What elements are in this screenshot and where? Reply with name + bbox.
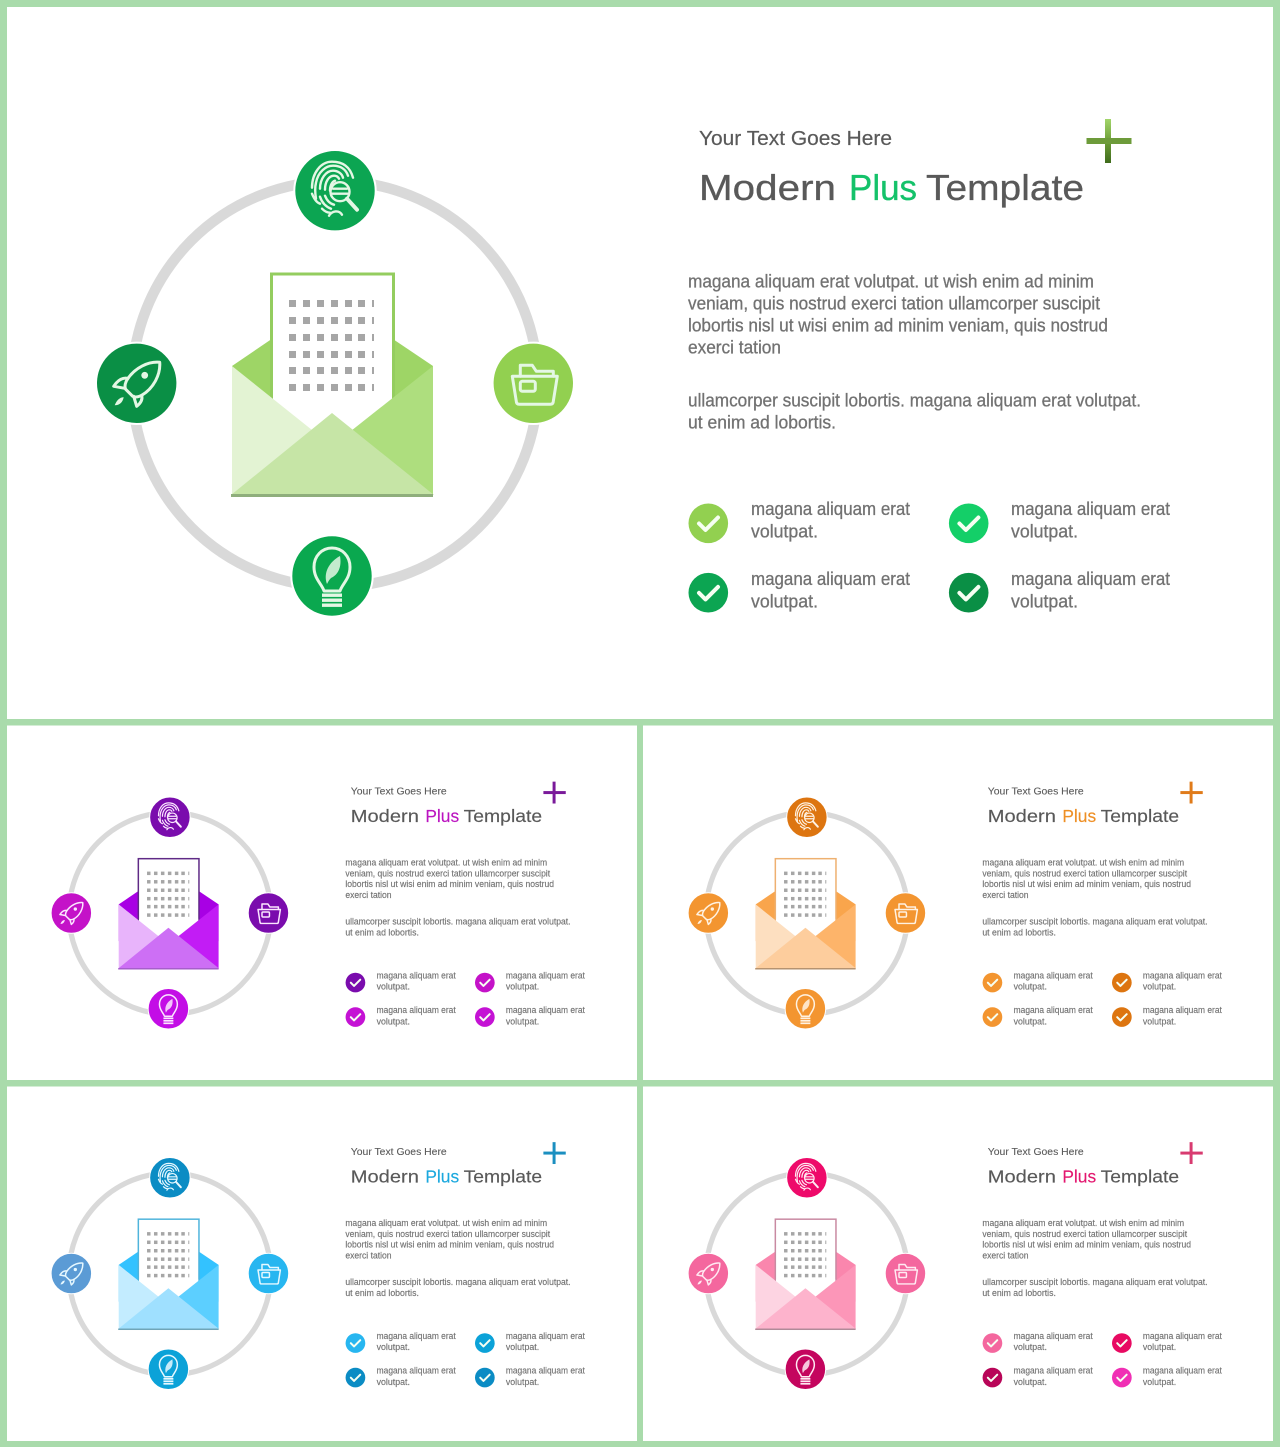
body text: exerci tation (982, 890, 1029, 900)
icon: fingerprint search (787, 797, 827, 838)
panel: main green slide (7, 7, 1273, 719)
icon: light bulb (291, 535, 373, 617)
check item 4 (1112, 1005, 1222, 1027)
body text: lobortis nisl ut wisi enim ad minim veniam, quis nostrud (982, 1240, 1191, 1250)
title: Modern (351, 1166, 419, 1186)
diagram ring (69, 1173, 271, 1375)
body text (345, 857, 570, 937)
icon: folder (493, 343, 574, 424)
subtitle: Your Text Goes Here (351, 787, 447, 798)
check item 1: volutpat. (377, 1342, 410, 1352)
body text: veniam, quis nostrud exerci tation ullamcorper suscipit (688, 294, 1100, 314)
icon: plus (543, 782, 566, 804)
body text (982, 857, 1207, 937)
check item 4: volutpat. (1143, 1377, 1176, 1387)
body text: lobortis nisl ut wisi enim ad minim veniam, quis nostrud (688, 316, 1108, 336)
envelope with paper (755, 859, 856, 970)
title: Plus (1062, 1166, 1096, 1186)
panel: purple slide (7, 726, 637, 1080)
check item 2 (1112, 970, 1222, 992)
check item 3 (983, 1366, 1093, 1387)
icon: rocket (96, 343, 177, 424)
icon: light bulb (148, 989, 189, 1029)
check item 1: volutpat. (1014, 982, 1047, 992)
title (351, 1166, 542, 1186)
check item 1: magana aliquam erat (1014, 1331, 1093, 1341)
check item 1: volutpat. (377, 982, 410, 992)
title: Plus (425, 806, 459, 826)
check item 1 (688, 499, 910, 543)
title: Modern (988, 1166, 1056, 1186)
check item 2 (949, 499, 1170, 543)
check item 3: magana aliquam erat (751, 569, 910, 589)
check item 2: magana aliquam erat (1143, 970, 1222, 980)
icon: folder (248, 893, 289, 933)
check item 4: magana aliquam erat (1143, 1005, 1222, 1015)
check item 3: volutpat. (1014, 1377, 1047, 1387)
subtitle: Your Text Goes Here (699, 127, 892, 150)
body text: exerci tation (345, 890, 392, 900)
check item 1: magana aliquam erat (377, 970, 456, 980)
title (988, 1166, 1179, 1186)
icon: plus (1086, 119, 1132, 163)
icon: plus (1180, 1142, 1203, 1164)
panel: pink slide (643, 1086, 1273, 1441)
body text (345, 1218, 570, 1298)
icon: plus (1180, 782, 1203, 804)
body text: ullamcorper suscipit lobortis. magana aliquam erat volutpat. (345, 1277, 570, 1287)
icon: rocket (688, 1253, 729, 1294)
body text: magana aliquam erat volutpat. ut wish enim ad minim (982, 1218, 1184, 1228)
diagram ring (706, 812, 908, 1014)
icon: rocket (51, 1253, 92, 1294)
check item 1 (983, 1331, 1093, 1353)
subtitle: Your Text Goes Here (988, 1147, 1084, 1158)
diagram ring (69, 812, 271, 1014)
title: Plus (425, 1166, 459, 1186)
check item 2 (475, 1331, 585, 1353)
icon: fingerprint search (294, 150, 376, 231)
body text: ut enim ad lobortis. (982, 1288, 1056, 1298)
pink slide content (688, 1142, 1222, 1389)
body text: exerci tation (345, 1251, 392, 1261)
blue slide content (51, 1142, 585, 1389)
body text: ut enim ad lobortis. (345, 1288, 419, 1298)
title (988, 806, 1179, 826)
body text: ut enim ad lobortis. (688, 412, 836, 432)
icon: light bulb (148, 1349, 189, 1389)
envelope with paper (118, 1219, 219, 1330)
check item 1: magana aliquam erat (751, 499, 910, 519)
check item 3: volutpat. (377, 1377, 410, 1387)
check item 4: magana aliquam erat (1011, 569, 1170, 589)
body text: ullamcorper suscipit lobortis. magana aliquam erat volutpat. (982, 1277, 1207, 1287)
body text: magana aliquam erat volutpat. ut wish enim ad minim (982, 857, 1184, 867)
diagram ring (132, 181, 538, 587)
body text: ut enim ad lobortis. (982, 927, 1056, 937)
title: Template (1101, 806, 1179, 826)
panel: blue slide (7, 1086, 637, 1441)
check item 3 (346, 1366, 456, 1387)
check item 3: magana aliquam erat (377, 1005, 456, 1015)
title: Template (464, 806, 542, 826)
check item 2: magana aliquam erat (506, 970, 585, 980)
check item 1: volutpat. (751, 522, 818, 542)
body text: ullamcorper suscipit lobortis. magana aliquam erat volutpat. (982, 917, 1207, 927)
body text: veniam, quis nostrud exerci tation ullamcorper suscipit (345, 868, 551, 878)
orange slide content (688, 782, 1222, 1029)
check item 2: magana aliquam erat (1143, 1331, 1222, 1341)
icon: fingerprint search (150, 1158, 190, 1198)
check item 2: magana aliquam erat (1011, 499, 1170, 519)
check item 2: volutpat. (1143, 982, 1176, 992)
title (699, 167, 1084, 208)
body text (982, 1218, 1207, 1298)
check item 3: magana aliquam erat (1014, 1005, 1093, 1015)
icon: light bulb (785, 989, 826, 1029)
title: Template (1101, 1166, 1179, 1186)
check item 4: magana aliquam erat (1143, 1366, 1222, 1376)
check item 4: magana aliquam erat (506, 1366, 585, 1376)
diagram ring (706, 1173, 908, 1375)
icon: folder (885, 893, 926, 933)
check item 1: volutpat. (1014, 1342, 1047, 1352)
envelope with paper (231, 274, 434, 497)
body text: lobortis nisl ut wisi enim ad minim veniam, quis nostrud (982, 879, 1191, 889)
title: Plus (1062, 806, 1096, 826)
check item 3: magana aliquam erat (1014, 1366, 1093, 1376)
body text: ullamcorper suscipit lobortis. magana aliquam erat volutpat. (345, 917, 570, 927)
title: Plus (849, 167, 917, 208)
panel: orange slide (643, 726, 1273, 1080)
check item 2: volutpat. (506, 1342, 539, 1352)
title: Modern (351, 806, 419, 826)
icon: fingerprint search (787, 1158, 827, 1198)
body text: magana aliquam erat volutpat. ut wish enim ad minim (688, 272, 1094, 292)
check item 3: volutpat. (751, 592, 818, 612)
check item 4 (949, 569, 1170, 612)
icon: fingerprint search (150, 797, 190, 838)
body text: magana aliquam erat volutpat. ut wish enim ad minim (345, 857, 547, 867)
body text: ullamcorper suscipit lobortis. magana aliquam erat volutpat. (688, 390, 1141, 410)
check item 2: volutpat. (506, 982, 539, 992)
check item 3: volutpat. (1014, 1016, 1047, 1026)
check item 4: volutpat. (1143, 1016, 1176, 1026)
title: Modern (699, 167, 836, 208)
check item 3 (688, 569, 910, 612)
body text: lobortis nisl ut wisi enim ad minim veniam, quis nostrud (345, 879, 554, 889)
subtitle: Your Text Goes Here (351, 1147, 447, 1158)
icon: rocket (51, 893, 92, 933)
body text (688, 272, 1141, 432)
check item 4 (475, 1005, 585, 1027)
check item 3 (346, 1005, 456, 1027)
icon: folder (885, 1253, 926, 1294)
check item 4: magana aliquam erat (506, 1005, 585, 1015)
check item 1 (346, 1331, 456, 1353)
body text: veniam, quis nostrud exerci tation ullamcorper suscipit (982, 1229, 1188, 1239)
check item 3 (983, 1005, 1093, 1027)
icon: plus (543, 1142, 566, 1164)
check item 4: volutpat. (1011, 592, 1078, 612)
icon: folder (248, 1253, 289, 1294)
check item 2: volutpat. (1143, 1342, 1176, 1352)
title: Template (926, 167, 1084, 208)
body text: ut enim ad lobortis. (345, 927, 419, 937)
icon: light bulb (785, 1349, 826, 1389)
check item 1: magana aliquam erat (1014, 970, 1093, 980)
purple slide content (51, 782, 585, 1029)
body text: lobortis nisl ut wisi enim ad minim veniam, quis nostrud (345, 1240, 554, 1250)
envelope with paper (118, 859, 219, 970)
body text: veniam, quis nostrud exerci tation ullamcorper suscipit (345, 1229, 551, 1239)
body text: veniam, quis nostrud exerci tation ullamcorper suscipit (982, 868, 1188, 878)
body text: exerci tation (688, 338, 781, 358)
check item 1: magana aliquam erat (377, 1331, 456, 1341)
icon: rocket (688, 893, 729, 933)
check item 4: volutpat. (506, 1377, 539, 1387)
body text: magana aliquam erat volutpat. ut wish enim ad minim (345, 1218, 547, 1228)
check item 2 (1112, 1331, 1222, 1353)
check item 3: volutpat. (377, 1016, 410, 1026)
title: Modern (988, 806, 1056, 826)
check item 1 (983, 970, 1093, 992)
title: Template (464, 1166, 542, 1186)
check item 4: volutpat. (506, 1016, 539, 1026)
check item 2: volutpat. (1011, 522, 1078, 542)
body text: exerci tation (982, 1251, 1029, 1261)
title (351, 806, 542, 826)
check item 3: magana aliquam erat (377, 1366, 456, 1376)
check item 2 (475, 970, 585, 992)
check item 2: magana aliquam erat (506, 1331, 585, 1341)
check item 1 (346, 970, 456, 992)
check item 4 (475, 1366, 585, 1387)
envelope with paper (755, 1219, 856, 1330)
check item 4 (1112, 1366, 1222, 1387)
subtitle: Your Text Goes Here (988, 787, 1084, 798)
